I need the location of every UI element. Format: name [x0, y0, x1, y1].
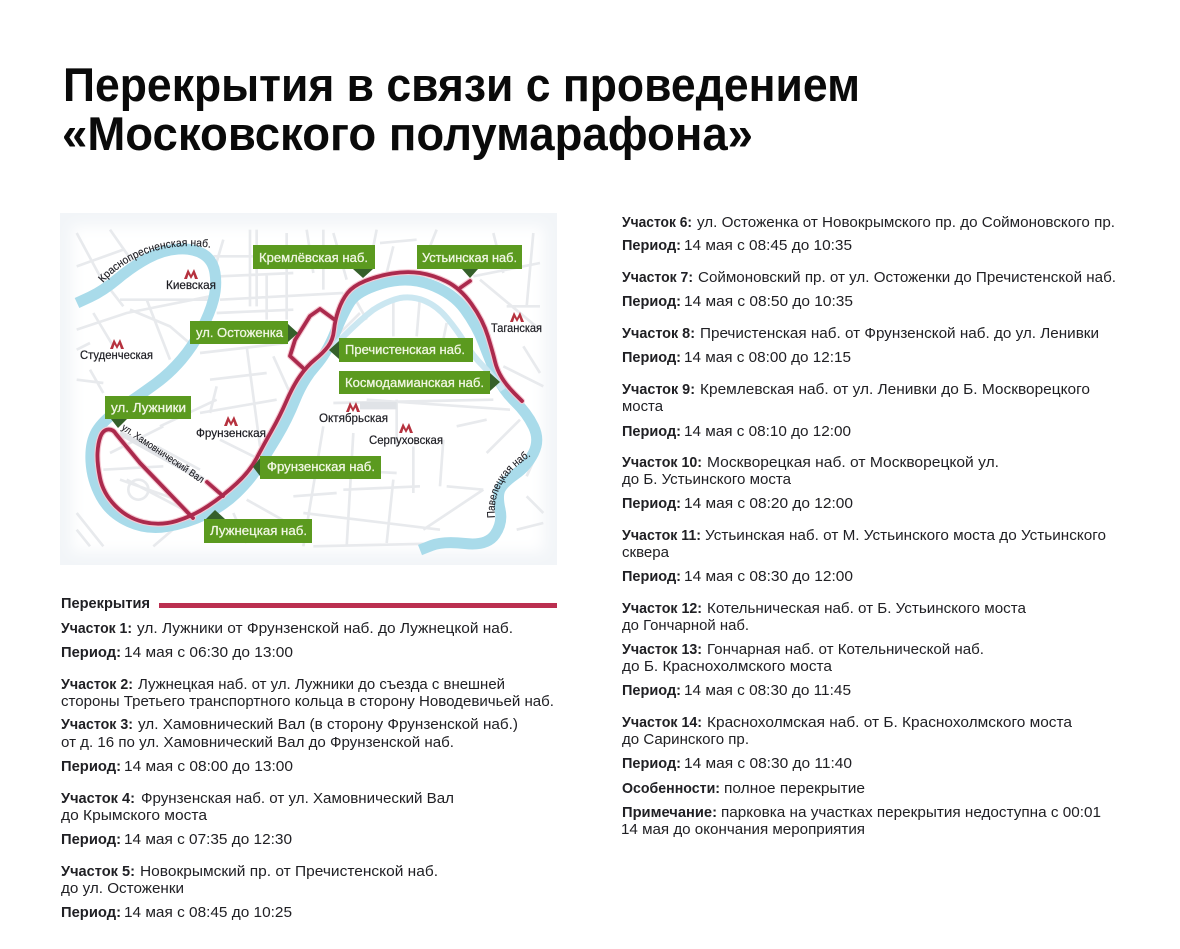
text block: features: полное перекрытие	[724, 780, 865, 797]
text block: features	[622, 780, 865, 797]
text block: note: Примечание:	[622, 804, 717, 821]
callout: Кремлёвская наб.	[253, 245, 375, 278]
callout: ул. Остоженка: ул. Остоженка	[196, 325, 284, 340]
text block: section 10: Участок 10:	[622, 454, 702, 471]
callout: Космодамианская наб.	[339, 371, 500, 394]
text block: section 12: Котельническая наб. от Б. Устьинского моста	[707, 600, 1027, 617]
text block: section 7: Период:	[622, 293, 681, 310]
text block: features: Особенности:	[622, 780, 720, 797]
text block: section 9: моста	[622, 398, 664, 415]
title	[62, 58, 860, 160]
text block: section 3: ул. Хамовнический Вал (в сторону Фрунзенской наб.)	[138, 716, 518, 733]
text block: note: 14 мая до окончания мероприятия	[621, 821, 865, 838]
text block: section 13: до Б. Краснохолмского моста	[622, 658, 833, 675]
text block: section 4: до Крымского моста	[61, 807, 208, 824]
text block: section 12: до Гончарной наб.	[622, 617, 749, 634]
text block: section 14: 14 мая с 08:30 до 11:40	[684, 755, 852, 772]
text block: section 8: 14 мая с 08:00 до 12:15	[684, 349, 851, 366]
text block: note	[621, 804, 1101, 838]
text block: section 11: 14 мая с 08:30 до 12:00	[684, 568, 853, 585]
callout: Устьинская наб.: Устьинская наб.	[422, 250, 517, 265]
text block: section 12	[622, 600, 1027, 634]
text block: section 5: Период:	[61, 904, 121, 921]
callout: Устьинская наб.	[417, 245, 522, 278]
text block: section 10: до Б. Устьинского моста	[622, 471, 792, 488]
metro: Киевская: Киевская	[166, 278, 216, 292]
text block: section 1	[61, 620, 513, 661]
street label: ул. Хамовнический Вал: ул. Хамовнический Вал	[119, 422, 206, 486]
text block: section 6: Участок 6:	[622, 214, 692, 231]
text block: section 3: Период:	[61, 758, 121, 775]
text block: section 8	[622, 325, 1099, 366]
street label: Краснопресненская наб.: Краснопресненская наб.	[98, 239, 210, 282]
text block: section 11: Устьинская наб. от М. Устьинского моста до Устьинского	[705, 527, 1106, 544]
text block: section 3	[61, 716, 518, 775]
callout: Кремлёвская наб.: Кремлёвская наб.	[259, 250, 368, 265]
text block: section 14: Участок 14:	[622, 714, 702, 731]
metro: Серпуховская: Серпуховская	[369, 433, 443, 447]
text block: section 9: Участок 9:	[622, 381, 695, 398]
text block: section 9: Период:	[622, 423, 681, 440]
text block: section 9	[622, 381, 1090, 440]
text block: section 10: Москворецкая наб. от Москворецкой ул.	[707, 454, 999, 471]
text block: section 10: 14 мая с 08:20 до 12:00	[684, 495, 853, 512]
text block: section 4: 14 мая с 07:35 до 12:30	[124, 831, 292, 848]
canal	[330, 297, 503, 390]
text block: section 7	[622, 269, 1116, 310]
text block: section 6: Период:	[622, 237, 681, 254]
text block: section 6: 14 мая с 08:45 до 10:35	[684, 237, 852, 254]
text block: section 4: Участок 4:	[61, 790, 135, 807]
metro: Серпуховская	[369, 423, 443, 447]
text block: section 5: Новокрымский пр. от Пречистенской наб.	[140, 863, 438, 880]
text block: section 2: стороны Третьего транспортного кольца в сторону Новодевичьей наб.	[61, 693, 554, 710]
text block: section 13: Участок 13:	[622, 641, 702, 658]
metro: Студенческая: Студенческая	[80, 348, 153, 362]
text block: section 3: от д. 16 по ул. Хамовнический Вал до Фрунзенской наб.	[61, 734, 454, 751]
text block: section 13: 14 мая с 08:30 до 11:45	[684, 682, 851, 699]
text block: section 8: Пречистенская наб. от Фрунзенской наб. до ул. Ленивки	[700, 325, 1099, 342]
text block: section 4: Фрунзенская наб. от ул. Хамовнический Вал	[141, 790, 454, 807]
text block: section 7: Соймоновский пр. от ул. Остоженки до Пречистенской наб.	[698, 269, 1116, 286]
text block: section 8: Участок 8:	[622, 325, 695, 342]
callout: Лужнецкая наб.	[204, 510, 312, 543]
text block: section 7: 14 мая с 08:50 до 10:35	[684, 293, 853, 310]
metro: Таганская: Таганская	[491, 321, 542, 335]
text block: section 14	[622, 714, 1073, 772]
text block: section 11: Участок 11:	[622, 527, 701, 544]
panel: map of closures	[60, 213, 557, 565]
callout: Фрунзенская наб.: Фрунзенская наб.	[267, 459, 375, 474]
metro: Таганская	[491, 312, 542, 335]
text block: section 12: Участок 12:	[622, 600, 702, 617]
text block: section 9: 14 мая с 08:10 до 12:00	[684, 423, 851, 440]
text block: section 8: Период:	[622, 349, 681, 366]
callout: Космодамианская наб.: Космодамианская наб.	[345, 375, 484, 390]
title: «Московского полумарафона»	[62, 107, 753, 160]
text block: section 5	[61, 863, 438, 921]
metro: Киевская	[166, 269, 216, 292]
street label: Павелецкая наб.: Павелецкая наб.	[486, 451, 530, 518]
text block: section 3: 14 мая с 08:00 до 13:00	[124, 758, 293, 775]
metro: Студенческая	[80, 339, 153, 362]
text block: section 1: Период:	[61, 644, 121, 661]
metro: Октябрьская	[319, 402, 388, 425]
legend: closures: Перекрытия	[61, 596, 150, 612]
text block: section 2: Лужнецкая наб. от ул. Лужники до съезда с внешней	[138, 676, 505, 693]
street grid	[77, 230, 543, 546]
callout: Лужнецкая наб.: Лужнецкая наб.	[210, 523, 307, 538]
text block: section 2: Участок 2:	[61, 676, 133, 693]
text block: section 14: Период:	[622, 755, 681, 772]
text block: section 9: Кремлевская наб. от ул. Ленивки до Б. Москворецкого	[700, 381, 1090, 398]
text block: section 11: сквера	[622, 544, 670, 561]
text block: section 14: до Саринского пр.	[622, 731, 749, 748]
text block: section 5: 14 мая с 08:45 до 10:25	[124, 904, 292, 921]
text block: section 11	[622, 527, 1106, 585]
legend: closures	[61, 596, 557, 612]
text block: note: парковка на участках перекрытия недоступна с 00:01	[721, 804, 1101, 821]
river	[77, 249, 537, 550]
callout: ул. Лужники	[105, 396, 191, 428]
text block: section 1: 14 мая с 06:30 до 13:00	[124, 644, 293, 661]
text block: section 6: ул. Остоженка от Новокрымского пр. до Соймоновского пр.	[697, 214, 1115, 231]
metro: Фрунзенская: Фрунзенская	[196, 426, 266, 440]
metro: Октябрьская: Октябрьская	[319, 411, 388, 425]
text block: section 1: ул. Лужники от Фрунзенской наб. до Лужнецкой наб.	[137, 620, 513, 637]
text block: section 13: Гончарная наб. от Котельнической наб.	[707, 641, 984, 658]
text block: section 10: Период:	[622, 495, 681, 512]
text block: section 13	[622, 641, 984, 699]
callout: ул. Остоженка	[190, 321, 298, 344]
text block: section 13: Период:	[622, 682, 681, 699]
text block: section 11: Период:	[622, 568, 681, 585]
closure route	[97, 272, 522, 524]
callout: ул. Лужники: ул. Лужники	[111, 400, 186, 415]
metro: Фрунзенская	[196, 416, 266, 440]
text block: section 2	[61, 676, 554, 710]
callout: Пречистенская наб.	[329, 338, 473, 362]
text block: section 5: до ул. Остоженки	[61, 880, 184, 897]
callout: Фрунзенская наб.	[253, 456, 381, 479]
text block: section 3: Участок 3:	[61, 716, 133, 733]
text block: section 4: Период:	[61, 831, 121, 848]
text block: section 1: Участок 1:	[61, 620, 132, 637]
text block: section 10	[622, 454, 999, 512]
title: Перекрытия в связи с проведением	[63, 58, 860, 111]
text block: section 4	[61, 790, 454, 848]
text block: section 14: Краснохолмская наб. от Б. Краснохолмского моста	[707, 714, 1073, 731]
callout: Пречистенская наб.: Пречистенская наб.	[345, 342, 465, 357]
text block: section 6	[622, 214, 1115, 254]
text block: section 5: Участок 5:	[61, 863, 135, 880]
text block: section 7: Участок 7:	[622, 269, 693, 286]
